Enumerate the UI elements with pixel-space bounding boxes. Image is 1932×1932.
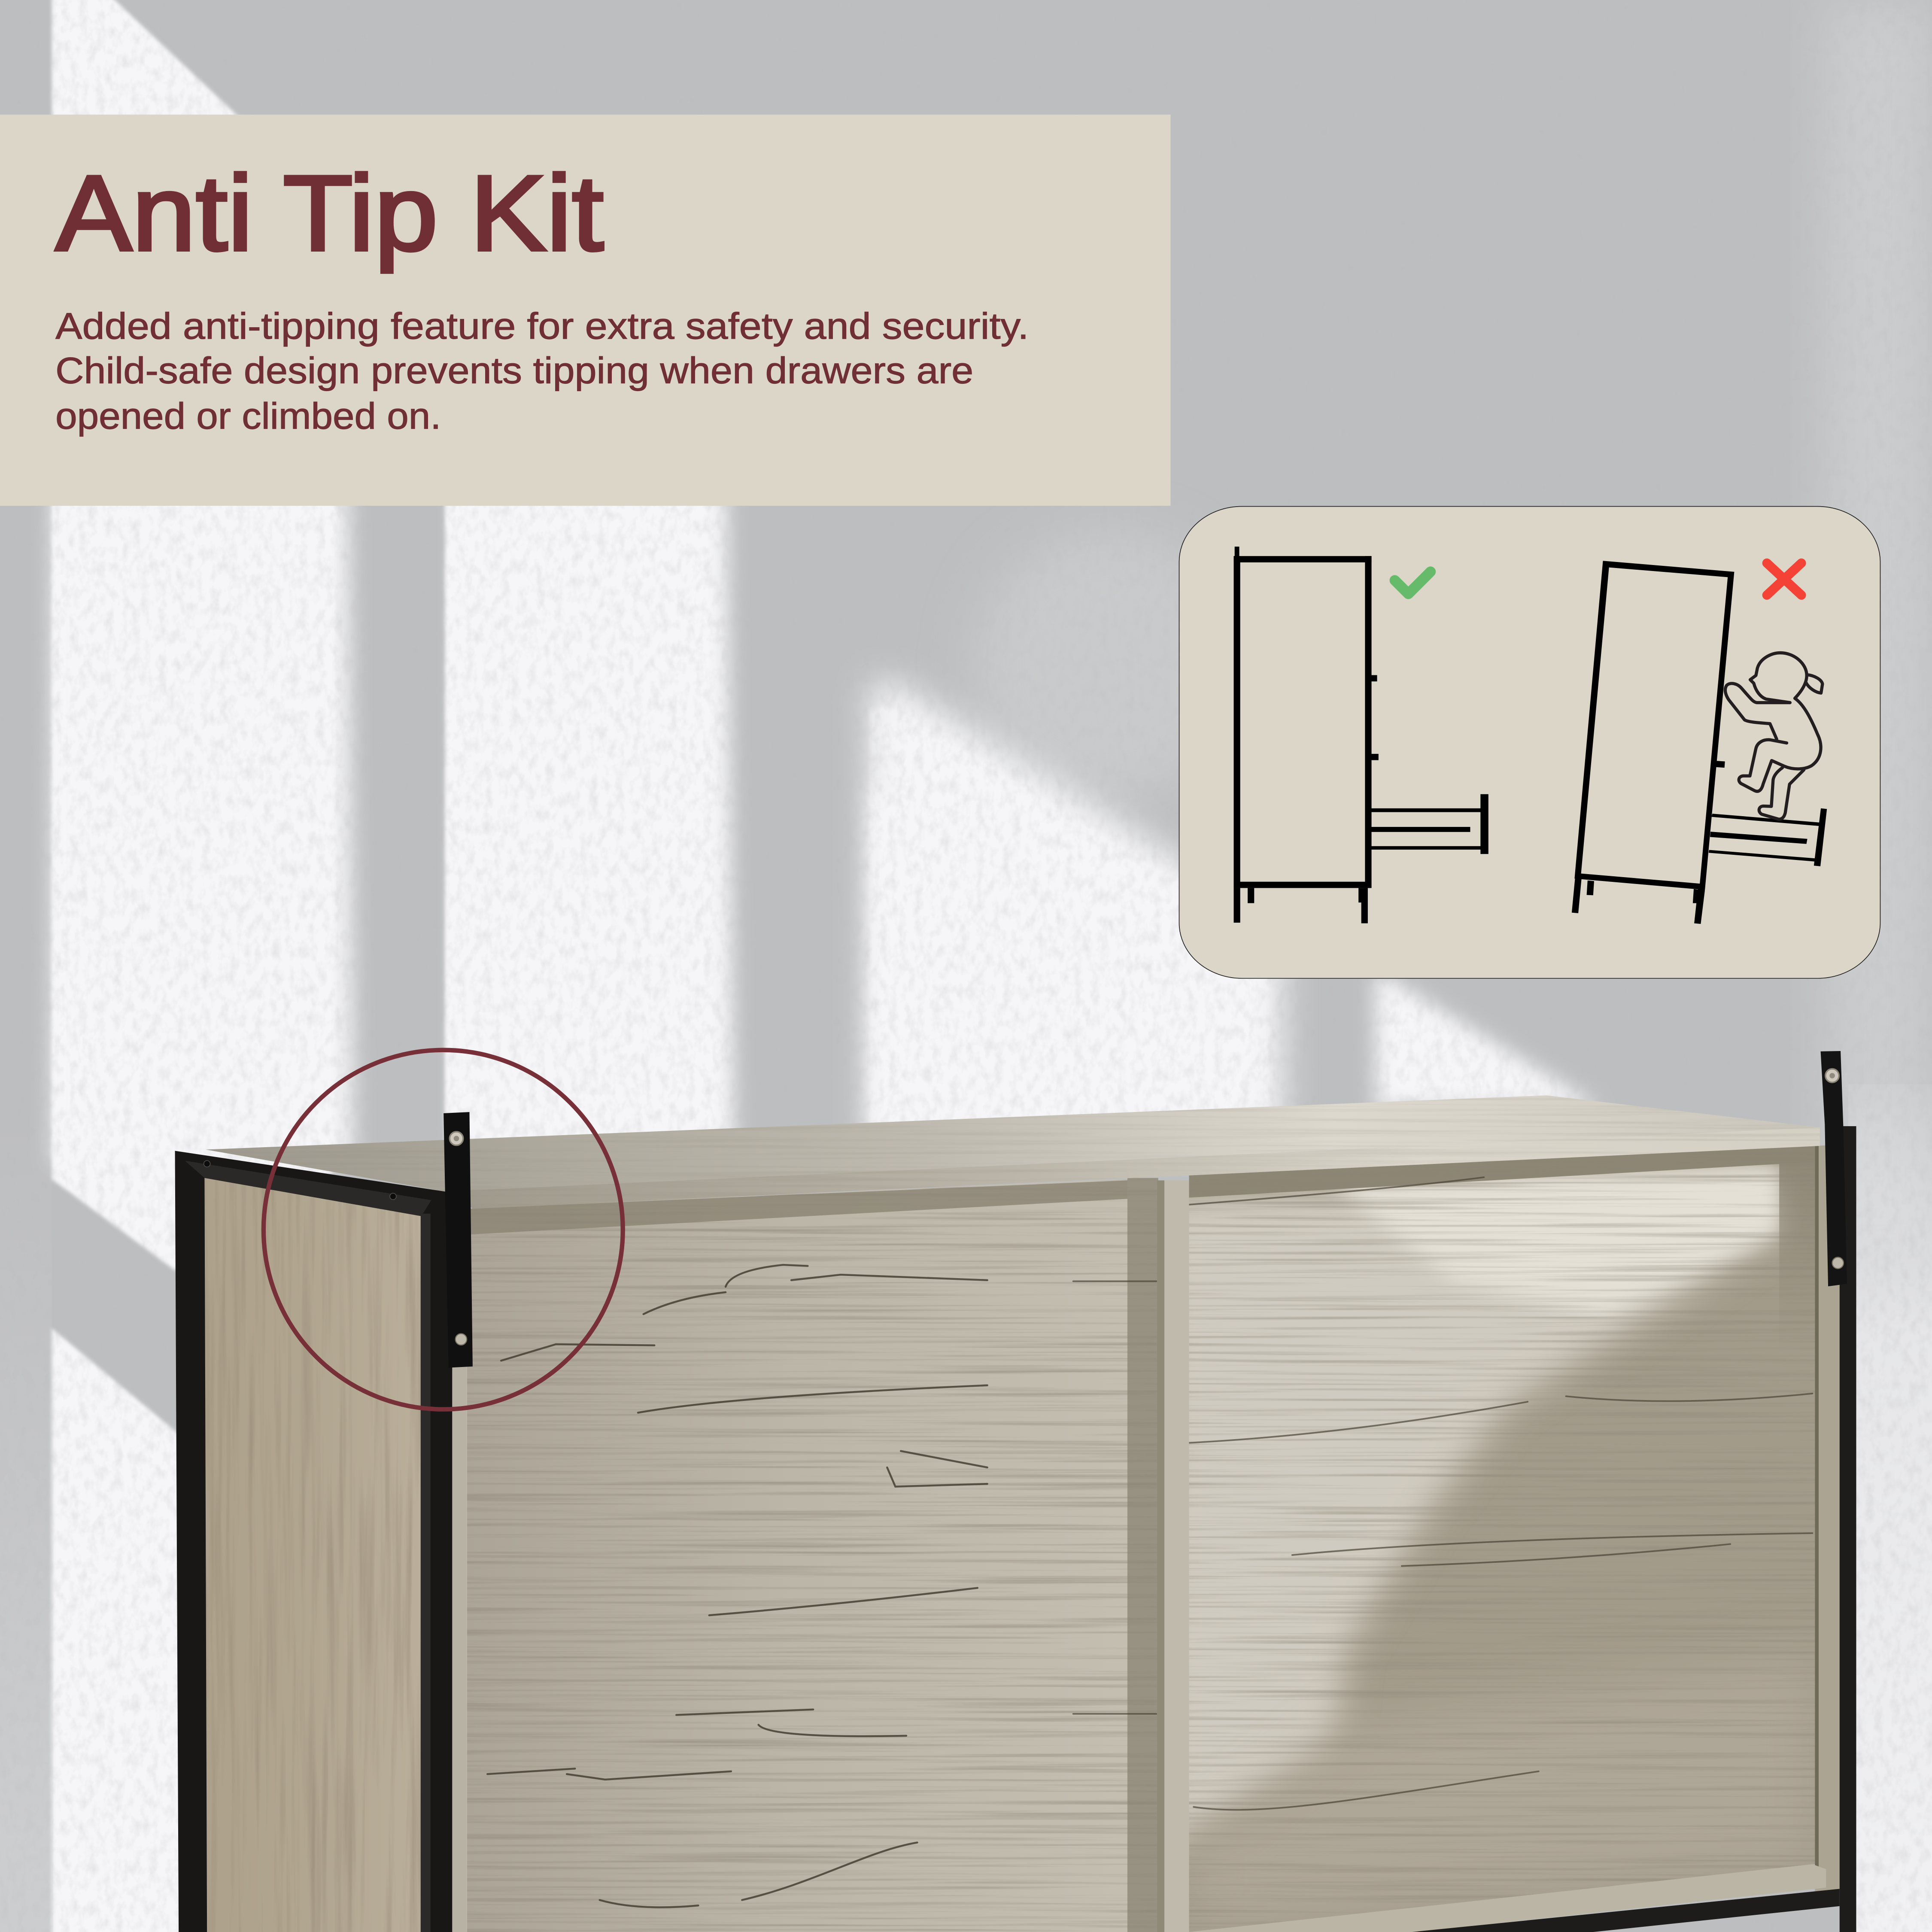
cabinet bbox=[175, 1091, 1856, 1932]
bottom rail bbox=[1412, 1889, 1840, 1932]
left compartment wood bbox=[462, 1170, 1164, 1932]
side wood panel bbox=[197, 1170, 431, 1932]
icon: stable anchored cabinet bbox=[1234, 547, 1488, 923]
center divider bbox=[1157, 1180, 1189, 1932]
frame screws bbox=[204, 1160, 396, 1200]
right strap bbox=[1821, 1051, 1847, 1286]
illustration panel bbox=[1179, 507, 1880, 978]
icon: tipping cabinet bbox=[1572, 561, 1827, 924]
black metal frame bbox=[175, 1126, 1856, 1932]
right side rim bbox=[1189, 1145, 1840, 1932]
left front rim bbox=[452, 1207, 467, 1932]
icon: green check mark bbox=[1395, 572, 1431, 594]
icon: climbing child bbox=[1725, 653, 1823, 819]
top surface bbox=[197, 1091, 1830, 1214]
title: Anti Tip Kit bbox=[55, 153, 604, 273]
right leg bbox=[1840, 1126, 1856, 1932]
description text: opened or climbed on. bbox=[55, 396, 441, 437]
right compartment wood bbox=[1073, 1140, 1823, 1932]
description text: Child-safe design prevents tipping when drawers are bbox=[55, 350, 973, 392]
description text bbox=[55, 306, 1029, 437]
title panel bbox=[0, 115, 1170, 506]
description text: Added anti-tipping feature for extra safety and security. bbox=[55, 306, 1029, 347]
callout circle bbox=[264, 1050, 623, 1410]
left strap bbox=[444, 1112, 473, 1368]
icon: red cross bbox=[1767, 563, 1801, 595]
